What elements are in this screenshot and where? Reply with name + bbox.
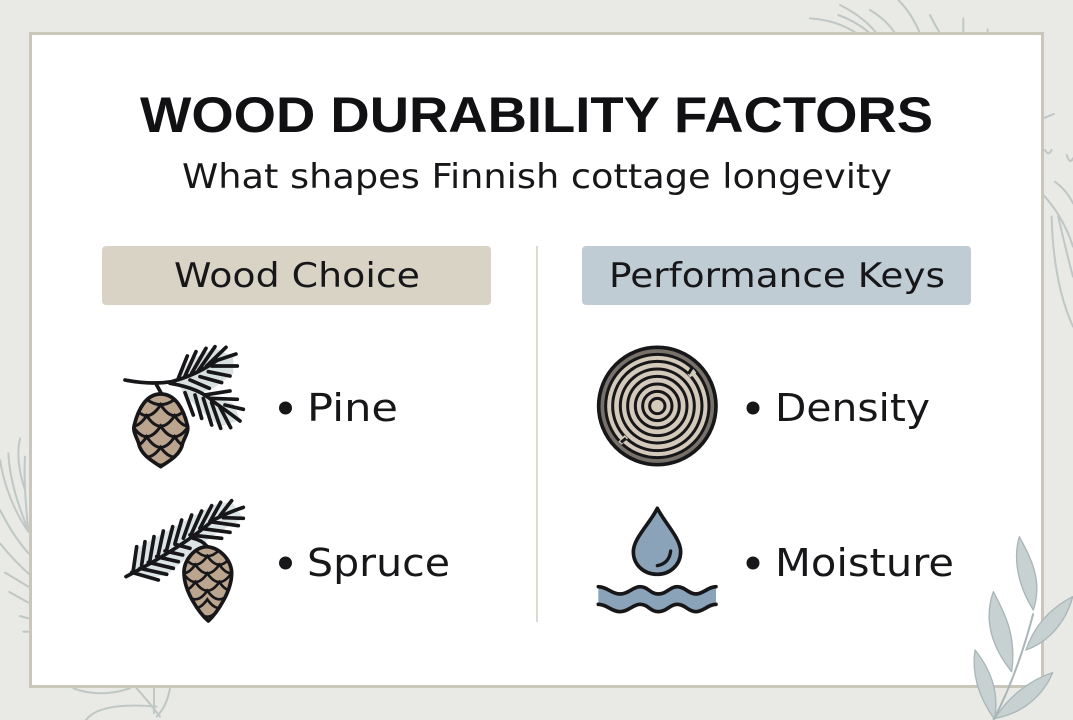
icon: spruce branch and cone xyxy=(126,501,243,621)
decoration: bottom left fern xyxy=(0,438,170,720)
icon: pine branch and cone xyxy=(119,347,243,467)
panel: wood choice xyxy=(102,246,491,621)
icon: water drop and waves xyxy=(598,508,716,612)
label: spruce: Spruce xyxy=(307,541,450,585)
title: WOOD DURABILITY FACTORS xyxy=(140,87,933,143)
label: pine: Pine xyxy=(307,386,398,430)
label: density: Density xyxy=(775,386,930,430)
label: pine xyxy=(279,386,398,430)
panel: performance keys xyxy=(582,246,971,612)
column divider xyxy=(536,246,538,622)
heading: wood choice: Wood Choice xyxy=(174,256,420,296)
label: moisture: Moisture xyxy=(775,541,954,585)
heading: performance keys: Performance Keys xyxy=(609,256,945,296)
decoration: top right fern xyxy=(810,0,1073,327)
heading: performance keys xyxy=(582,246,971,305)
decoration: bottom right leaf sprig xyxy=(974,537,1073,720)
heading: wood choice xyxy=(102,246,491,305)
subtitle: What shapes Finnish cottage longevity xyxy=(182,157,892,197)
icon: log cross-section xyxy=(599,347,716,465)
